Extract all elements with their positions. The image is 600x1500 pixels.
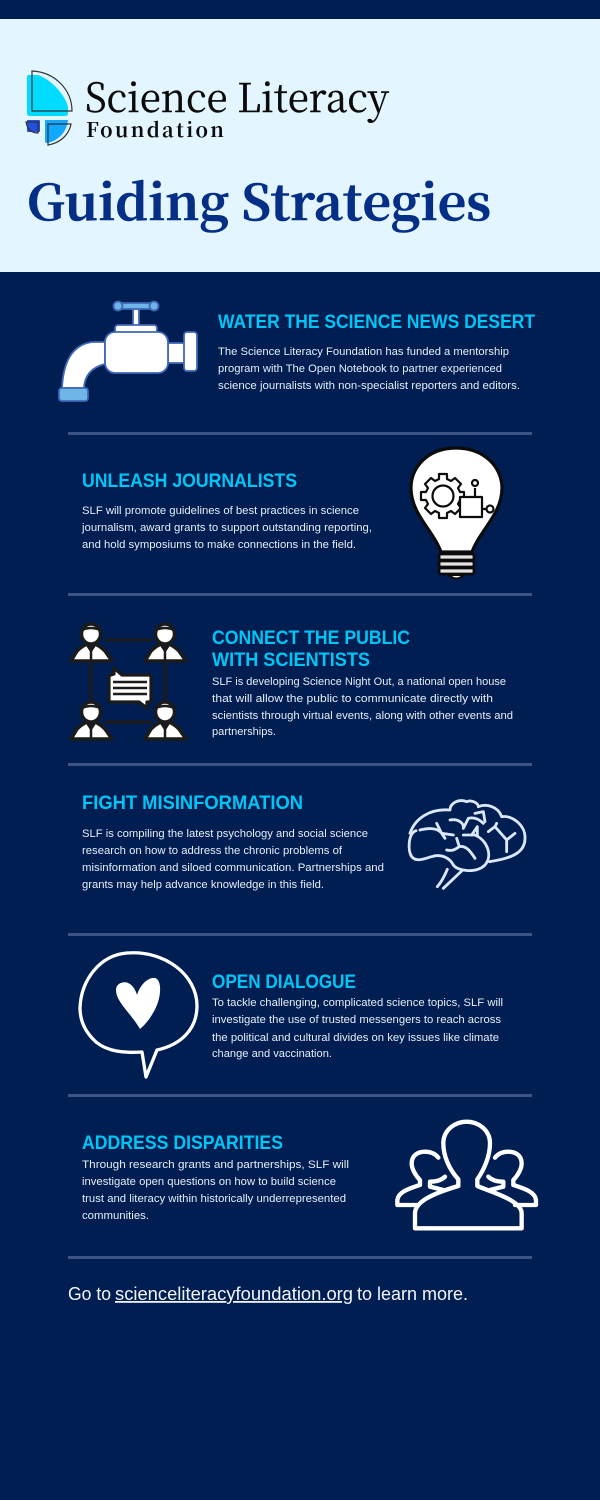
- footer call to action: to learn more.: [357, 1284, 468, 1304]
- body text: SLF is compiling the latest psychology and social science: [82, 828, 368, 840]
- body text: The Science Literacy Foundation has funded a mentorship: [218, 346, 509, 358]
- heading: WITH SCIENTISTS: [212, 650, 370, 671]
- heading: UNLEASH JOURNALISTS: [82, 471, 297, 492]
- heading: CONNECT THE PUBLIC: [212, 628, 410, 649]
- body text: the political and cultural divides on key issues like climate: [212, 1032, 499, 1044]
- body text: journalism, award grants to support outstanding reporting,: [81, 522, 372, 534]
- section: fight misinformation: [82, 793, 525, 891]
- section: unleash journalists: [81, 448, 502, 578]
- icon: speech bubble with heart: [80, 953, 197, 1077]
- heading: [212, 628, 410, 671]
- section: connect the public with scientists: [71, 624, 513, 739]
- icon: faucet: [59, 302, 197, 401]
- body text: program with The Open Notebook to partner experienced: [218, 363, 502, 375]
- section: address disparities: [82, 1122, 536, 1228]
- section: open dialogue: [80, 953, 503, 1077]
- footer call to action: [68, 1284, 468, 1304]
- body text: SLF is developing Science Night Out, a national open house: [212, 676, 506, 688]
- heading: FIGHT MISINFORMATION: [82, 793, 303, 814]
- icon: group of people: [397, 1122, 536, 1228]
- body text: trust and literacy within historically underrepresented: [82, 1193, 346, 1205]
- body text: To tackle challenging, complicated science topics, SLF will: [212, 997, 503, 1009]
- icon: brain: [409, 801, 525, 888]
- body text: [212, 997, 503, 1060]
- body text: [212, 676, 513, 738]
- heading: OPEN DIALOGUE: [212, 972, 356, 993]
- body text: communities.: [82, 1210, 149, 1222]
- body text: science journalists with non-specialist reporters and editors.: [218, 380, 520, 392]
- body text: [218, 346, 520, 392]
- body text: research on how to address the chronic problems of: [82, 845, 343, 857]
- body text: [81, 505, 372, 551]
- body text: scientists through virtual events, along with other events and: [212, 710, 513, 722]
- footer call to action: Go to: [68, 1284, 111, 1304]
- body text: investigate open questions on how to build science: [82, 1176, 336, 1188]
- section: water the science news desert: [59, 302, 535, 401]
- body text: change and vaccination.: [212, 1048, 332, 1060]
- body text: SLF will promote guidelines of best practices in science: [82, 505, 359, 517]
- icon: connected people with speech bubble: [71, 624, 186, 739]
- title: Guiding Strategies: [27, 165, 491, 235]
- body text: [82, 828, 384, 891]
- body text: investigate the use of trusted messengers to reach across: [212, 1014, 502, 1026]
- body text: partnerships.: [212, 726, 276, 738]
- heading: WATER THE SCIENCE NEWS DESERT: [218, 312, 535, 333]
- body text: misinformation and siloed communication. Partnerships and: [82, 862, 384, 874]
- logo wordmark: Foundation: [86, 114, 224, 143]
- body text: that will allow the public to communicate directly with: [212, 693, 493, 705]
- body text: and hold symposiums to make connections in the field.: [82, 539, 356, 551]
- body text: Through research grants and partnerships, SLF will: [82, 1159, 349, 1171]
- logo wordmark: Science Literacy: [85, 67, 390, 124]
- icon: light bulb with gear: [411, 448, 502, 578]
- body text: grants may help advance knowledge in this field.: [82, 879, 324, 891]
- footer call to action: scienceliteracyfoundation.org: [115, 1284, 353, 1304]
- logo mark: [26, 71, 72, 145]
- heading: ADDRESS DISPARITIES: [82, 1133, 283, 1154]
- header panel: [0, 19, 600, 272]
- body text: [82, 1159, 349, 1222]
